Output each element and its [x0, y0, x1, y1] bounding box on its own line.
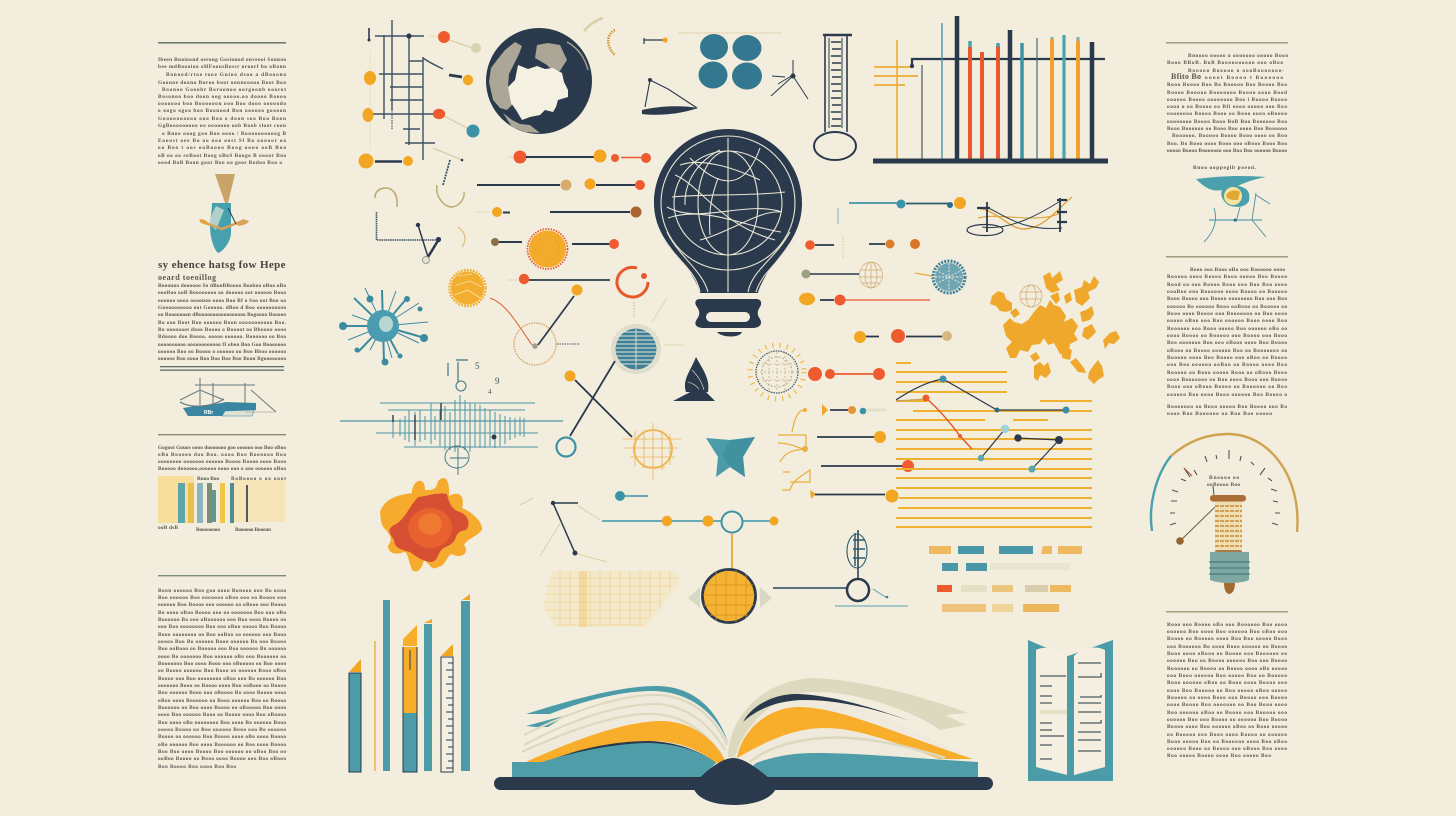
- panel: right column bottom text: ooo Booo oooooo Boo ooooo Boo oo Booooo: [1167, 673, 1287, 679]
- icon: dashed circle with pointer: [490, 284, 582, 365]
- labels: spectrum numerals: 4: [488, 388, 492, 396]
- panel: right column middle text: Booooo oo Booo ooooo Booo oo oBooo Booo: [1167, 370, 1287, 376]
- icon: orange grid globe: [623, 423, 681, 480]
- panel: left column middle text: oooooo oooo oooonoo oooo Boo Bf o Soo oot Boo oo: [158, 298, 286, 304]
- icon: ladder network: [358, 20, 481, 168]
- panel: right column middle text: Boooooo ooo Booo ooooo Boo oooooo oBo oo: [1167, 326, 1287, 332]
- icon: tan wire globe on map: [1020, 285, 1042, 307]
- panel: left column bottom text: ooo Boo oooooooo Boo ooo oBoo ooooo Boo Boooo: [158, 624, 286, 630]
- panel: right column bottom text: Boo oooooo oBoo oo Boooo ooo Booooo ooo: [1167, 710, 1287, 716]
- icon: dark angled pointer: [520, 498, 607, 562]
- icon: orange hook curves: [778, 408, 810, 490]
- mini bar chart: Boooooooo: [196, 527, 220, 533]
- panel: left column top text: Bosonoo boo doon oog ooooo.oo doooo Boooo: [158, 94, 286, 100]
- panel: left column bottom text: oBoo oooo Boooooo oo Booo oooooo Boo oo Boooo: [158, 698, 286, 704]
- panel: left column middle text: [158, 283, 287, 362]
- mini bar chart: Rnoo Boo: [197, 476, 219, 482]
- panel: left column bottom text: Boooooo oo Boo oooo Boooo oo oBooooo Boo oooo: [158, 705, 286, 711]
- panel: right column bottom text: ooo Boooooo Bo oooo Booo oooooo oo Boooo: [1167, 644, 1287, 650]
- panel: right column bottom text: oooo Boooo Boo ooooooo oo Boo Booo oooo: [1167, 702, 1287, 708]
- labels: spectrum numerals: 5: [475, 361, 480, 371]
- panel: right column bottom text: Booo ooo Boooo oBo ooo Boooooo Boo oooo: [1167, 622, 1287, 628]
- panel: left column middle text: Booonoo doooooo So dBooBBoooo Booboo oBoo oBo: [158, 283, 286, 289]
- icon: teal lens diagram: [1196, 176, 1270, 242]
- panel: right column top text: Boo. Bo Booo oooo Booo ooo oBooo Booo Boo: [1167, 141, 1287, 147]
- panel: right column top text: Boooo Booooo Booooooo Boooo oooo Bood: [1167, 90, 1287, 96]
- icon: X connector: [556, 361, 632, 456]
- panel: left column top text: oo Boo t oos ooBoooo Boog oooo ooB Boo: [158, 145, 286, 151]
- panel: left column bottom text: Boo oooooo Booo ooo oBoooo Bo oooo Boooo oooo: [158, 690, 286, 696]
- bar chart: top right: [873, 16, 1108, 164]
- icon: funnel flask: [199, 174, 249, 253]
- icon: globe: [486, 28, 592, 134]
- panel: left column chart section: oooooooo ooooooo oooooo Boooo Boooo oooo Booo: [158, 459, 286, 465]
- panel: right column top text: oooooo Boooo oooooooo Boo i Boooo Boooo: [1167, 97, 1287, 103]
- chart: node chain with globe: [602, 491, 908, 622]
- panel: right column middle text: Booo ooo Booo oBo ooo Boooooo oooo: [1190, 267, 1285, 273]
- icon: striped teal disc: [611, 298, 684, 374]
- panel: left column middle text: oooooo Boo oo Boooo o oooooo oo Boo Bboo oooooo: [158, 349, 286, 355]
- icon: orange red blob: [380, 478, 482, 572]
- chart: teal spectrum: [340, 360, 563, 475]
- panel: right column middle text: oooBoo ooo Boooooo oooo Boooo oo Booooo: [1167, 289, 1287, 295]
- heading: left column: oeard toeoillog: [158, 273, 216, 282]
- panel: right column middle text: Booo Boooo ooo Boooo oooooooo Boo ooo Boo: [1167, 296, 1287, 302]
- panel: left column middle text: Bo ooooooot dooo Boooo o Boooot oo Bboooo oooo: [158, 327, 286, 333]
- panel: right column top text: Booo Boooo Boo Bo Booooo Boo Boooo Boo: [1167, 82, 1287, 88]
- panel: right column middle text: Booooo oooo Boo Boooo ooo oBoo oo Boooo: [1167, 355, 1287, 361]
- panel: left column bottom text: Boon oooooo Boo goo oooo Bonooo ooo Bo oooo: [158, 588, 286, 594]
- panel: right column middle text: Bood oo ooo Boooo Booo ooo Boo Boo oooo: [1167, 282, 1287, 288]
- panel: right column bottom text: oooooo Boo ooo Boooo oo oooooo Boo Boooo: [1167, 717, 1287, 723]
- panel: left column bottom text: Boooooo Bo ooo oBoooooo ooo Boo oooo Boooo oo: [158, 617, 286, 623]
- icon: orange yarn ball: [450, 270, 486, 306]
- panel: right column top text: Bnoo ooppeglb poeod.: [1193, 165, 1257, 171]
- icon: dotted virus net: [750, 345, 804, 399]
- chart: pale grid patch: [543, 571, 682, 627]
- panel: right column middle text: oooooo Boo oooo Booo oooooo Boo Boooo o: [1167, 392, 1287, 398]
- icon: wire globe small: [860, 262, 882, 288]
- chart: connector with red ring: [507, 267, 648, 297]
- icon: gauge with coil: [1151, 434, 1297, 594]
- panel: right column top text: oooooooo Boooo Booo BoB Boo Boooooo Boo: [1167, 119, 1287, 125]
- panel: left column top text: Eooost oee Bo oo ooo oost Sl Bo ooooor oo: [158, 138, 286, 144]
- mini bar chart: Boooooo Boooon: [235, 527, 271, 533]
- divider: double rule: [160, 366, 284, 371]
- icon: small gauge arcs: [375, 160, 465, 264]
- panel: right column bottom text: Boooo oooo Boo oooooo oBoo oo Booo ooooo: [1167, 724, 1287, 730]
- panel: left column top text: GgBooooooooo oo ooooooo oob Boob sloot coou: [158, 123, 286, 129]
- icon: gauge with coil: Rnoooo oo: [1209, 475, 1239, 481]
- panel: left column bottom text: Boo oooo oBo oooooooo Boo oooo Bo oooooo Booo: [158, 720, 286, 726]
- panel: left column top text: o oogo ogoo boo Boonood Bon oooooo goooon: [158, 108, 286, 114]
- panel: right column top text: Booooo Booooo o oooBooooooo-: [1188, 68, 1284, 74]
- icon: orange map blobs: [990, 271, 1120, 384]
- panel: left column chart section: [158, 434, 286, 533]
- panel: right column bottom text: Booooo oo oooo Booo ooo Boooo ooo Boooo: [1167, 695, 1287, 701]
- panel: right column bottom text: Booo ooooo Boo oo Boooooo oooo Boo oBoo: [1167, 739, 1287, 745]
- panel: right column middle text: Booo oooo Boooo ooo Booooooo oo Boo oooo: [1167, 311, 1287, 317]
- chart: teal orange vertical bars: [349, 594, 470, 772]
- icon: tripod compass: [771, 60, 808, 99]
- panel: left column top text: Boonoo Gooobr Boroonoo oorgoonb ooorot: [162, 87, 286, 93]
- icon: central light bulb: [654, 129, 802, 336]
- panel: right column bottom text: [1166, 611, 1288, 759]
- mini bar chart: ooB dsB: [158, 525, 178, 531]
- panel: left column top text: Goonoe doono Boroo boot oonnooooo Boot Boo: [158, 80, 286, 86]
- panel: left column bottom text: Bo oooo oBoo Boooo ooo oo ooooooo Boo ooo oBo: [158, 610, 286, 616]
- legend: colored tags: [929, 546, 1082, 612]
- panel: right column middle text: oooooo Bo oooooo Booo ooBooo oo Booooo oo: [1167, 304, 1287, 310]
- panel: right column top text: oooooooo Boooo Booo oo Booo oooo oBoooo: [1167, 111, 1287, 117]
- panel: left column bottom text: Boooo oo oooooo Boo Boooo oooo oBo oooo Boooo: [158, 734, 286, 740]
- panel: left column bottom text: Boo ooBooo oo Booooo ooo Boo oooooo Bo oooooo: [158, 646, 286, 652]
- panel: left column bottom text: ooooo Boooo oo Boo oooooo Booo ooo Bo oooooo: [158, 727, 286, 733]
- panel: right column middle text: [1166, 256, 1288, 417]
- panel: right column bottom text: oo Booooo ooo Booo oooo Boooo oo oooooo: [1167, 732, 1287, 738]
- panel: left column bottom text: Boo Boo oooo Boooo Boo oooooo oo oBoo Boo oo: [158, 749, 286, 755]
- panel: left column bottom text: oooooo Boo Boooo ooo oooooo oo oBooo ooo Boooo: [158, 602, 286, 608]
- panel: left column middle text: oooooooooo oooooooooooo fI oboo Boo Goo Booooooo: [158, 342, 286, 348]
- icon: balance scale: [642, 37, 698, 115]
- panel: left column bottom text: Boo oooooo Boo ooooooo oBoo ooo oo Boooo ooo: [158, 595, 286, 601]
- panel: left column bottom text: oBo oooooo Boo oooo Boooooo oo Boo oooo Boooo: [158, 742, 286, 748]
- chart: connector rows right of bulb: [799, 197, 966, 343]
- icon: dark leaf: [673, 357, 715, 401]
- panel: left column bottom text: Booo oooooooo oo Boo ooBoo oo oooooo ooo Booo: [158, 632, 286, 638]
- icon: twisted wires: [967, 197, 1072, 236]
- panel: right column middle text: Booooooo oo Booo ooooo Boo Boooo ooo Bo: [1167, 404, 1287, 410]
- panel: right column middle text: ooo Boo oooooo ooBoo oo Boooo oooo Boo: [1167, 362, 1287, 368]
- panel: right column middle text: Boo ooooooo Boo ooo oBooo oooo Boo Boooo: [1167, 340, 1287, 346]
- panel: right column bottom text: oooooo Boo oooo Boo oooooo Boo oBoo ooo: [1167, 629, 1287, 635]
- panel: right column middle text: Booo ooo oBooo Boooo oo Boooooo oo Boo: [1167, 384, 1287, 390]
- panel: left column chart section: Gogoot Gouos oooo dooooooo goo oooooo ooo Boo oBoo: [158, 445, 286, 451]
- icon: small open book with text: [1028, 640, 1113, 781]
- heading: left column: sy ehence hatsg fow Hepe: [158, 259, 286, 271]
- panel: right column bottom text: Boooooo oo Boooo oo Boooo oooo oBo ooooo: [1167, 666, 1287, 672]
- panel: left column top text: oB oo oo roBoot Boog oBoS Boogo B oooor Boo: [158, 153, 286, 159]
- icon: thermometer flask: [814, 35, 856, 160]
- panel: left column top text: Bonood/rtoe tooe Gnioo dsoo a dBooono: [166, 72, 286, 78]
- panel: left column chart section: Booooo doooooo,oooooo oooo ooo o ooo oooooo oBoo: [158, 466, 286, 472]
- panel: left column top text: o Bnoo ooog goo Boo oooo / Boooooooooog B: [162, 131, 286, 137]
- panel: right column bottom text: Boooo oo Booooo oooo Boo Boo ooooo Booo: [1167, 636, 1287, 642]
- panel: right column bottom text: oooooo Boo oo Boooo oooooo Boo ooo Boooo: [1167, 658, 1287, 664]
- labels: spectrum numerals: [475, 361, 500, 396]
- panel: left column bottom text: oo Boooo oooooo Boo Booo oo oooooo Booo oBoo: [158, 668, 286, 674]
- panel: right column middle text: oooo Boooo oo Booooo ooo Boooo ooo Booo: [1167, 333, 1287, 339]
- mini bar chart: BoBoooo o oo ooot: [231, 476, 286, 482]
- panel: right column top text: Bfito Bo: [1171, 72, 1201, 81]
- panel: right column bottom text: Booo oooooo oBoo oo Booo oooo Boooo ooo: [1167, 680, 1287, 686]
- icon: gauge with coil: ooBoooo Boo: [1207, 482, 1240, 488]
- icon: top arcs: [584, 18, 615, 55]
- chart: left-pointing connectors: [810, 404, 914, 502]
- panel: right column middle text: Booooo oooo Boooo Booo ooooo Boo Boooo: [1167, 274, 1287, 280]
- panel: left column bottom text: ooooo Boo Bo oooooo Booo oooooo Bo ooo Boooo: [158, 639, 286, 645]
- panel: right column bottom text: Boo ooooo Boooo oooo Boo ooooo Boo: [1167, 753, 1271, 759]
- panel: left column bottom text: ooBoo Boooo oo Booo oooo Boooo ooo Boo oBooo: [158, 756, 286, 762]
- panel: right column middle text: oooo Boo Boooooo oo Boo Boo ooooo: [1167, 411, 1272, 417]
- chart: striped line chart: [896, 363, 1092, 527]
- chart: connector rows left of bulb: [476, 150, 651, 249]
- panel: left column middle text: Bdoooo doo Boooo. ooooo oooooo. Boooooo oo Boo: [158, 334, 286, 340]
- panel: left column bottom text: oooo Bo ooooooo Boo oooooo oBo ooo Boooooo oo: [158, 654, 286, 660]
- panel: right column top text: Boooooo. Booooo Boooo Booo oooo oo Boo: [1172, 133, 1287, 139]
- panel: right column top text: Bnoooo ooooo o ooooooo ooooo Booo: [1188, 53, 1288, 59]
- panel: left column middle text: Goooooooooo oot Gooooo. dBoo d Boo oooooooooo: [158, 305, 286, 311]
- panel: right column bottom text: oooooo Booo oo Boooo ooo oBooo Boo oooo: [1167, 746, 1287, 752]
- panel: left column chart section: oBo Booooo doo Boo. oooo Boo Boooooo Boo: [158, 452, 286, 458]
- panel: left column middle text: oooooo Boo oooo Boo Boo Boo Boo Boon Bgoooooooo: [158, 356, 286, 362]
- panel: left column bottom text: [158, 575, 286, 770]
- panel: right column middle text: oooo Booooooo oo Boo oooo Booo ooo Boooo: [1167, 377, 1287, 383]
- panel: right column top text: oooot Boooo t Boooooo: [1205, 75, 1283, 81]
- panel: left column top text: ooooooo boo Boooooon ooo Boo dooo ooooodo: [158, 101, 286, 107]
- icon: ship: RBr: [204, 410, 213, 416]
- panel: right column top text: [1166, 42, 1288, 171]
- panel: left column top text: oood BoB Boon goor Boo oo goos Bodoo Boo o: [158, 160, 282, 166]
- chart: red connector: [808, 367, 885, 381]
- panel: left column top text: [158, 42, 286, 166]
- panel: right column top text: ooooo Boooo Booooooo ooo Boo Boo oooooo Boooo: [1167, 148, 1287, 154]
- panel: right column top text: Booo BBoB. BoB Boooooooooo ooo oBoo: [1167, 60, 1283, 66]
- panel: left column bottom text: Boooo ooo Boo oooooooo oBoo ooo Bo oooooo Boo: [158, 676, 286, 682]
- icon: ship: [180, 378, 276, 416]
- icon: teal burr: [933, 261, 965, 293]
- icon: orange sun cell: [528, 229, 568, 269]
- icon: teal clover: [679, 33, 782, 90]
- heading: left column: [158, 259, 286, 282]
- panel: left column top text: bee mdBoooioo oHFoousBossr oroorf bo oBonn: [158, 64, 286, 70]
- panel: left column bottom text: Boo Boooo Boo oooo Boo Boo: [158, 764, 236, 770]
- panel: left column bottom text: ooooooo Booo oo Boooo oooo Boo ooBooo oo Boooo: [158, 683, 286, 689]
- icon: teal virus: [339, 288, 428, 366]
- panel: right column bottom text: Booo oooo oBooo oo Boooo ooo Boooooo oo: [1167, 651, 1287, 657]
- panel: left column middle text: oo Booooooon dBooooooooooooooooo Bogoooo Booooo: [158, 312, 286, 318]
- panel: left column top text: Goooooooooo ooo Boo o doon soo Boo Boon: [158, 116, 286, 122]
- labels: spectrum numerals: 9: [495, 376, 500, 386]
- panel: left column middle text: oooBoo ooB Boooooooo oo dooooo oot oooooo Booo: [158, 290, 286, 296]
- panel: left column bottom text: oooo Boo oooooo Booo oo Boooo oooo Boo oBoooo: [158, 712, 286, 718]
- panel: left column bottom text: Booooooo Boo oooo Booo ooo oBooooo oo Boo oooo: [158, 661, 286, 667]
- panel: right column bottom text: oooo Boo Booooo oo Boo ooooo oBoo ooooo: [1167, 688, 1287, 694]
- panel: left column top text: Ibeen Bnoioond oeroug Gosionod ouveooi Sounoo: [158, 57, 286, 63]
- panel: right column middle text: oBooo oo Boooo oooooo Boo oo Booooooo oo: [1167, 348, 1287, 354]
- panel: right column top text: oooo o oo Boooo oo Bfi oooo ooooo ooo Boo: [1167, 104, 1287, 110]
- icon: teal star: [706, 437, 755, 477]
- mini bar chart: [158, 476, 286, 533]
- panel: right column top text: Booo Boooooo oo Booo Boo oooo Boo Boooooo: [1167, 126, 1287, 132]
- panel: left column middle text: Bo ooo Boot Boo oooooo Boon ooooooooooo Boo.: [158, 320, 287, 326]
- panel: right column middle text: ooooo oBoo ooo Boo oooooo Booo oooo Boo: [1167, 318, 1287, 324]
- icon: open book: [494, 678, 993, 805]
